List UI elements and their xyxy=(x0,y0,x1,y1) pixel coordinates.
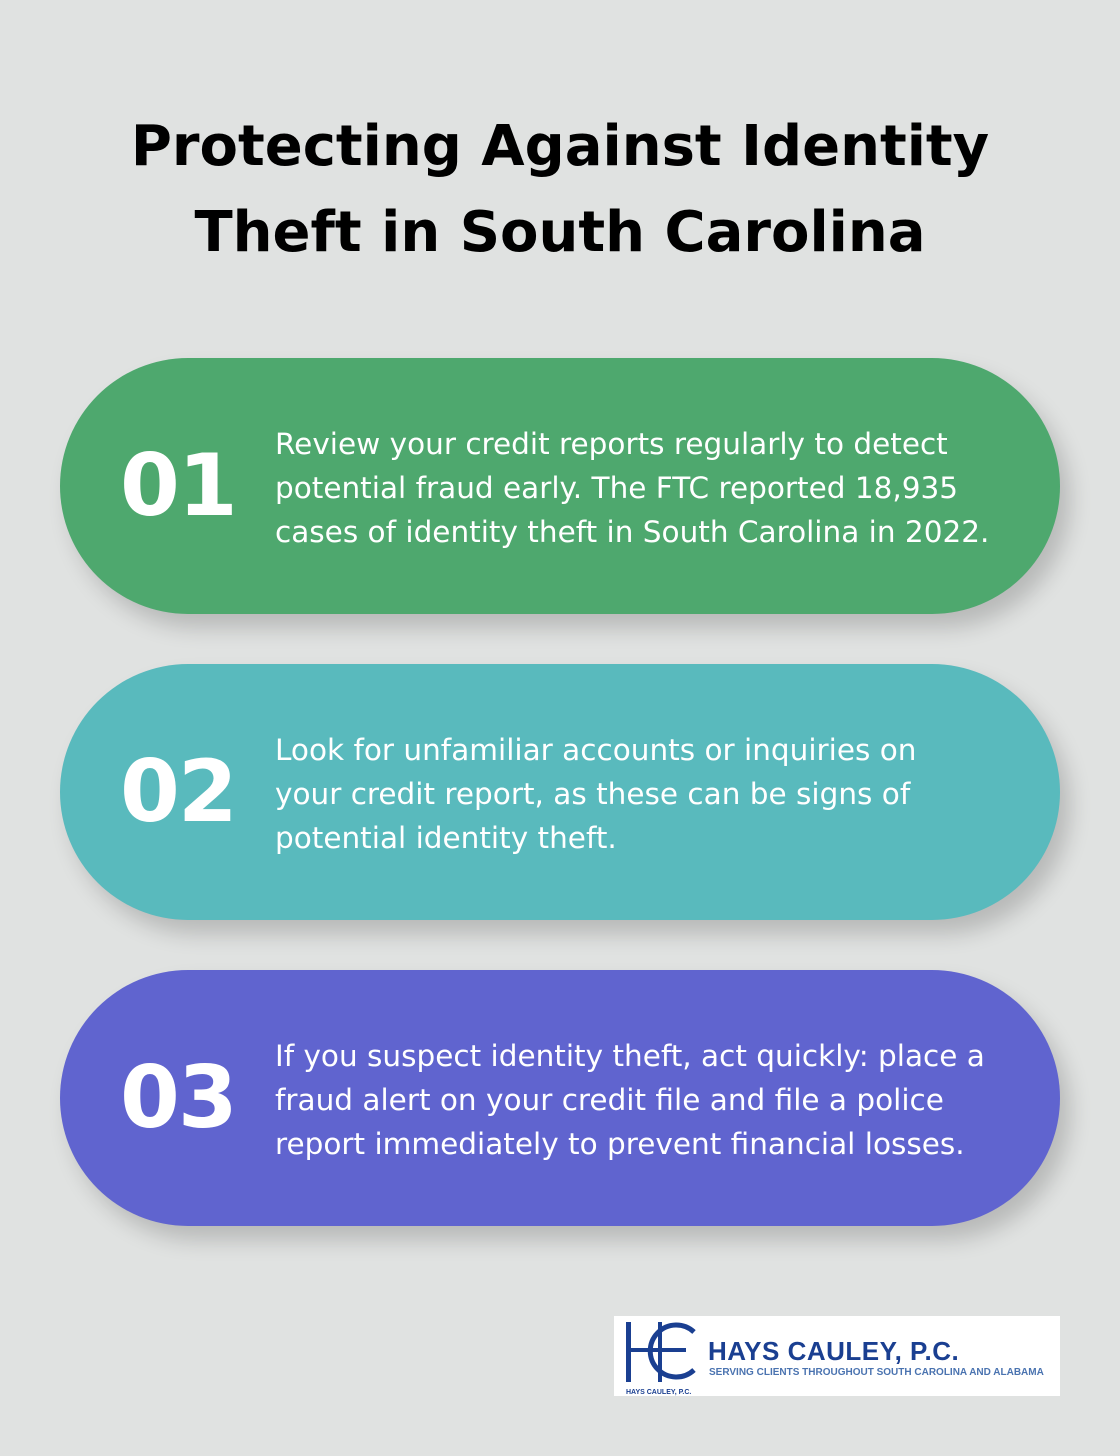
number 01: 01 xyxy=(120,436,236,536)
text 03: If you suspect identity theft, act quickly: place a xyxy=(275,1039,985,1073)
text 02: your credit report, as these can be signs of xyxy=(275,777,910,811)
number 03: 03 xyxy=(120,1048,236,1148)
icon: HC monogram xyxy=(626,1322,696,1396)
icon: HC monogram: HAYS CAULEY, P.C. xyxy=(626,1389,691,1396)
text 03: report immediately to prevent financial losses. xyxy=(275,1127,965,1161)
text 01: potential fraud early. The FTC reported 18,935 xyxy=(275,471,958,505)
panel: step 03 xyxy=(60,970,1060,1226)
logo tagline: SERVING CLIENTS THROUGHOUT SOUTH CAROLINA AND ALABAMA xyxy=(709,1367,1044,1378)
title: Theft in South Carolina xyxy=(194,200,926,265)
text 01: Review your credit reports regularly to detect xyxy=(275,427,948,461)
text 02: Look for unfamiliar accounts or inquiries on xyxy=(275,733,916,767)
text 03: fraud alert on your credit file and file a police xyxy=(275,1083,944,1117)
panel: step 02 xyxy=(60,664,1060,920)
text 02: potential identity theft. xyxy=(275,821,617,855)
text 01 xyxy=(275,427,989,549)
title: Protecting Against Identity xyxy=(131,114,989,179)
panel: step 01 xyxy=(60,358,1060,614)
title xyxy=(131,114,989,265)
text 01: cases of identity theft in South Carolina in 2022. xyxy=(275,515,989,549)
number 02: 02 xyxy=(120,742,236,842)
logo name: HAYS CAULEY, P.C. xyxy=(708,1336,959,1366)
text 02 xyxy=(275,733,916,855)
text 03 xyxy=(275,1039,985,1161)
logo xyxy=(614,1316,1060,1396)
